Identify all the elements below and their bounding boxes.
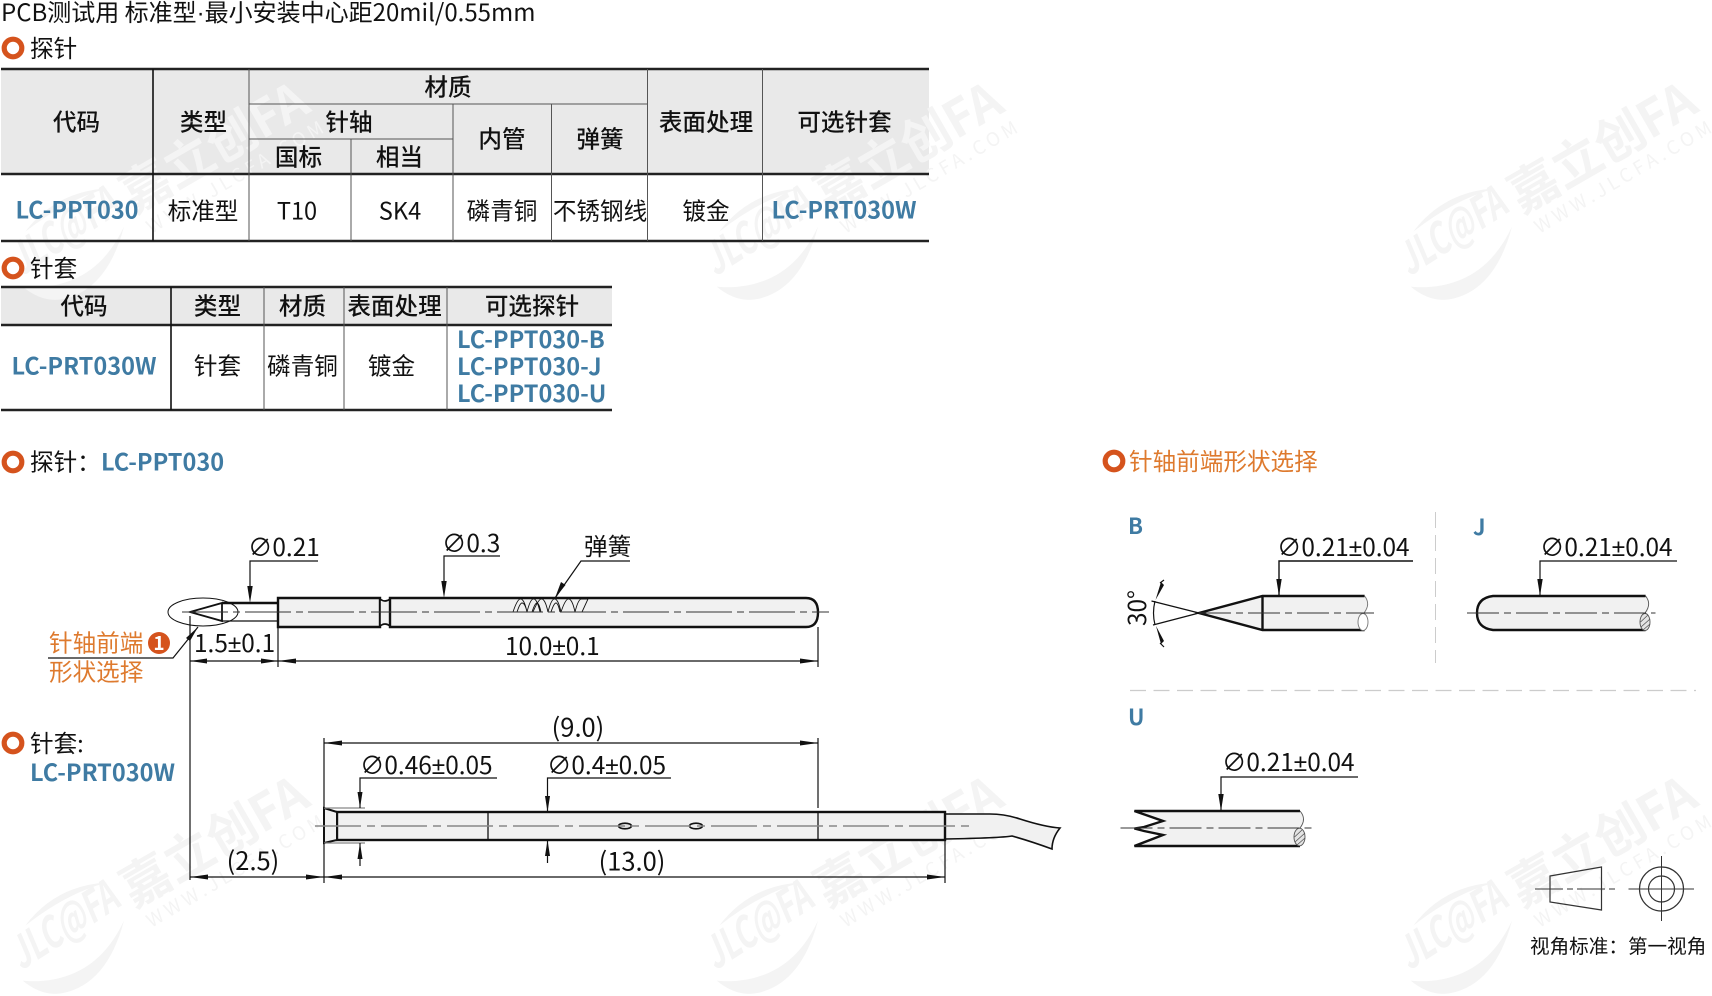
dimension: diameter 0.3: ∅0.3 <box>442 525 500 560</box>
callout: tip shape selection: 形状选择 <box>49 654 143 688</box>
watermark: top right: 嘉立创FA <box>1493 61 1709 227</box>
table: probe specs: 针轴 <box>325 104 373 138</box>
table: probe specs: 弹簧 <box>576 120 624 154</box>
dimension: 2.5: (2.5) <box>227 841 279 878</box>
table: probe specs: T10 <box>277 192 317 226</box>
drawing: sleeve <box>315 808 1060 849</box>
heading: sleeve drawing: LC-PRT030W <box>30 754 175 788</box>
watermark: bottom right: WWW.JLCFA.COM <box>1529 808 1712 933</box>
table: probe specs <box>1 68 929 241</box>
spring <box>513 599 588 612</box>
tip type B <box>1119 509 1413 647</box>
tip type B: 30° <box>1119 590 1154 626</box>
tip type J <box>1467 510 1677 630</box>
table: probe specs: 类型 <box>180 104 227 138</box>
dimension: 10.0 <box>278 627 818 667</box>
table: sleeve specs: 磷青铜 <box>267 348 338 382</box>
watermark: top middle: WWW.JLCFA.COM <box>835 114 1022 239</box>
watermark: bottom middle: WWW.JLCFA.COM <box>835 808 1022 933</box>
watermark: top right: JLC@FA <box>1383 170 1517 288</box>
dimension: diameter 0.4: ∅0.4±0.05 <box>547 747 666 782</box>
table: probe specs: 相当 <box>376 138 423 172</box>
heading: tip shape selection: 针轴前端形状选择 <box>1129 443 1318 477</box>
heading: probe drawing: 探针： <box>30 444 101 478</box>
watermark: top middle: 嘉立创FA <box>799 61 1015 227</box>
panel: table background fills <box>1 70 929 325</box>
heading: probe table: 探针 <box>30 30 77 64</box>
watermark: top right <box>1383 61 1712 300</box>
table: sleeve specs: LC-PPT030-J <box>457 348 602 382</box>
ellipse around tip <box>168 598 238 626</box>
dimension: 10.0: 10.0±0.1 <box>505 628 600 663</box>
watermark: bottom right <box>1383 755 1712 994</box>
dimension: 1.5 <box>190 616 278 880</box>
table: sleeve specs: LC-PPT030-B <box>457 321 605 355</box>
dimension: diameter 0.21 <box>247 529 320 603</box>
dimension: 9.0 <box>324 708 818 808</box>
watermark: top right: WWW.JLCFA.COM <box>1529 114 1712 239</box>
table: sleeve specs: 表面处理 <box>347 288 442 322</box>
tip type U: U <box>1128 700 1144 732</box>
table: sleeve specs: 代码 <box>60 288 108 322</box>
label: spring <box>555 528 631 598</box>
watermark: bottom middle: JLC@FA <box>689 864 823 982</box>
table: probe specs: 内管 <box>478 120 526 154</box>
table: probe specs: 不锈钢线 <box>553 192 647 226</box>
watermark: top middle: JLC@FA <box>689 170 823 288</box>
tip type U <box>1120 700 1358 846</box>
callout: tip shape selection: 1 <box>153 629 165 656</box>
table: probe specs: LC-PPT030 <box>15 192 139 226</box>
tip type B: ∅0.21±0.04 <box>1277 529 1410 564</box>
watermark: bottom left: 嘉立创FA <box>105 755 321 921</box>
dimension: 1.5: 1.5±0.1 <box>194 625 275 660</box>
watermark: bottom left <box>0 755 328 994</box>
heading: sleeve table: 针套 <box>30 250 77 284</box>
table: sleeve specs: 材质 <box>279 288 326 322</box>
caption: viewing angle: 视角标准：第一视角 <box>1530 930 1706 959</box>
icon: first-angle projection symbol <box>1535 856 1694 921</box>
dimension: diameter 0.4 <box>545 747 671 863</box>
tip type J: J <box>1473 510 1486 542</box>
table: sleeve specs: LC-PRT030W <box>12 348 157 382</box>
table: sleeve specs: 可选探针 <box>485 288 579 322</box>
dimension: diameter 0.46: ∅0.46±0.05 <box>360 747 493 782</box>
watermark: bottom right: 嘉立创FA <box>1493 755 1709 921</box>
table: probe specs: 表面处理 <box>659 104 753 138</box>
watermark: top left: WWW.JLCFA.COM <box>141 114 328 239</box>
watermark: bottom right: JLC@FA <box>1383 864 1517 982</box>
callout: tip shape selection <box>48 624 198 688</box>
watermark: bottom middle <box>689 755 1022 994</box>
table: sleeve specs <box>1 287 612 410</box>
dimension: 9.0: (9.0) <box>552 708 604 744</box>
dimension: 2.5 <box>190 841 324 883</box>
dimension: 13.0 <box>324 840 945 883</box>
table: probe specs: 磷青铜 <box>467 192 537 226</box>
table: sleeve specs: 类型 <box>194 288 241 322</box>
heading: sleeve table <box>4 250 77 284</box>
label: spring: 弹簧 <box>584 528 631 562</box>
table: probe specs: 镀金 <box>682 192 730 226</box>
table: sleeve specs: 镀金 <box>368 348 415 382</box>
heading: probe drawing <box>4 444 224 478</box>
heading: probe table <box>4 30 77 64</box>
heading: sleeve drawing: 针套: <box>30 725 84 759</box>
watermark: bottom left: WWW.JLCFA.COM <box>141 808 328 933</box>
dimension: diameter 0.3 <box>441 525 500 598</box>
dimension: diameter 0.21: ∅0.21 <box>248 529 320 564</box>
drawing: probe <box>168 598 829 627</box>
watermark: bottom middle: 嘉立创FA <box>799 755 1015 921</box>
watermark: top left: 嘉立创FA <box>105 61 321 227</box>
divider lines <box>1130 512 1696 690</box>
table: probe specs: 代码 <box>53 104 100 138</box>
tip type B: B <box>1128 509 1143 541</box>
table: probe specs: 标准型 <box>168 192 238 226</box>
table: probe specs: SK4 <box>379 192 421 226</box>
watermark: top left <box>0 61 328 300</box>
table: probe specs: 可选针套 <box>797 104 892 138</box>
callout: tip shape selection: 针轴前端 <box>49 624 143 658</box>
tip type U: ∅0.21±0.04 <box>1222 744 1355 779</box>
table: probe specs: LC-PRT030W <box>772 192 917 226</box>
table: sleeve specs: 针套 <box>194 348 241 382</box>
dimension: diameter 0.46 <box>358 747 497 866</box>
watermark: top middle <box>689 61 1022 300</box>
dimension: 13.0: (13.0) <box>599 842 665 878</box>
table: sleeve specs: LC-PPT030-U <box>457 375 606 409</box>
table: probe specs: 材质 <box>424 68 472 102</box>
tip type J: ∅0.21±0.04 <box>1540 529 1673 564</box>
table: probe specs: 国标 <box>275 138 322 172</box>
heading: sleeve drawing <box>4 725 175 788</box>
heading: probe drawing: LC-PPT030 <box>101 444 224 478</box>
